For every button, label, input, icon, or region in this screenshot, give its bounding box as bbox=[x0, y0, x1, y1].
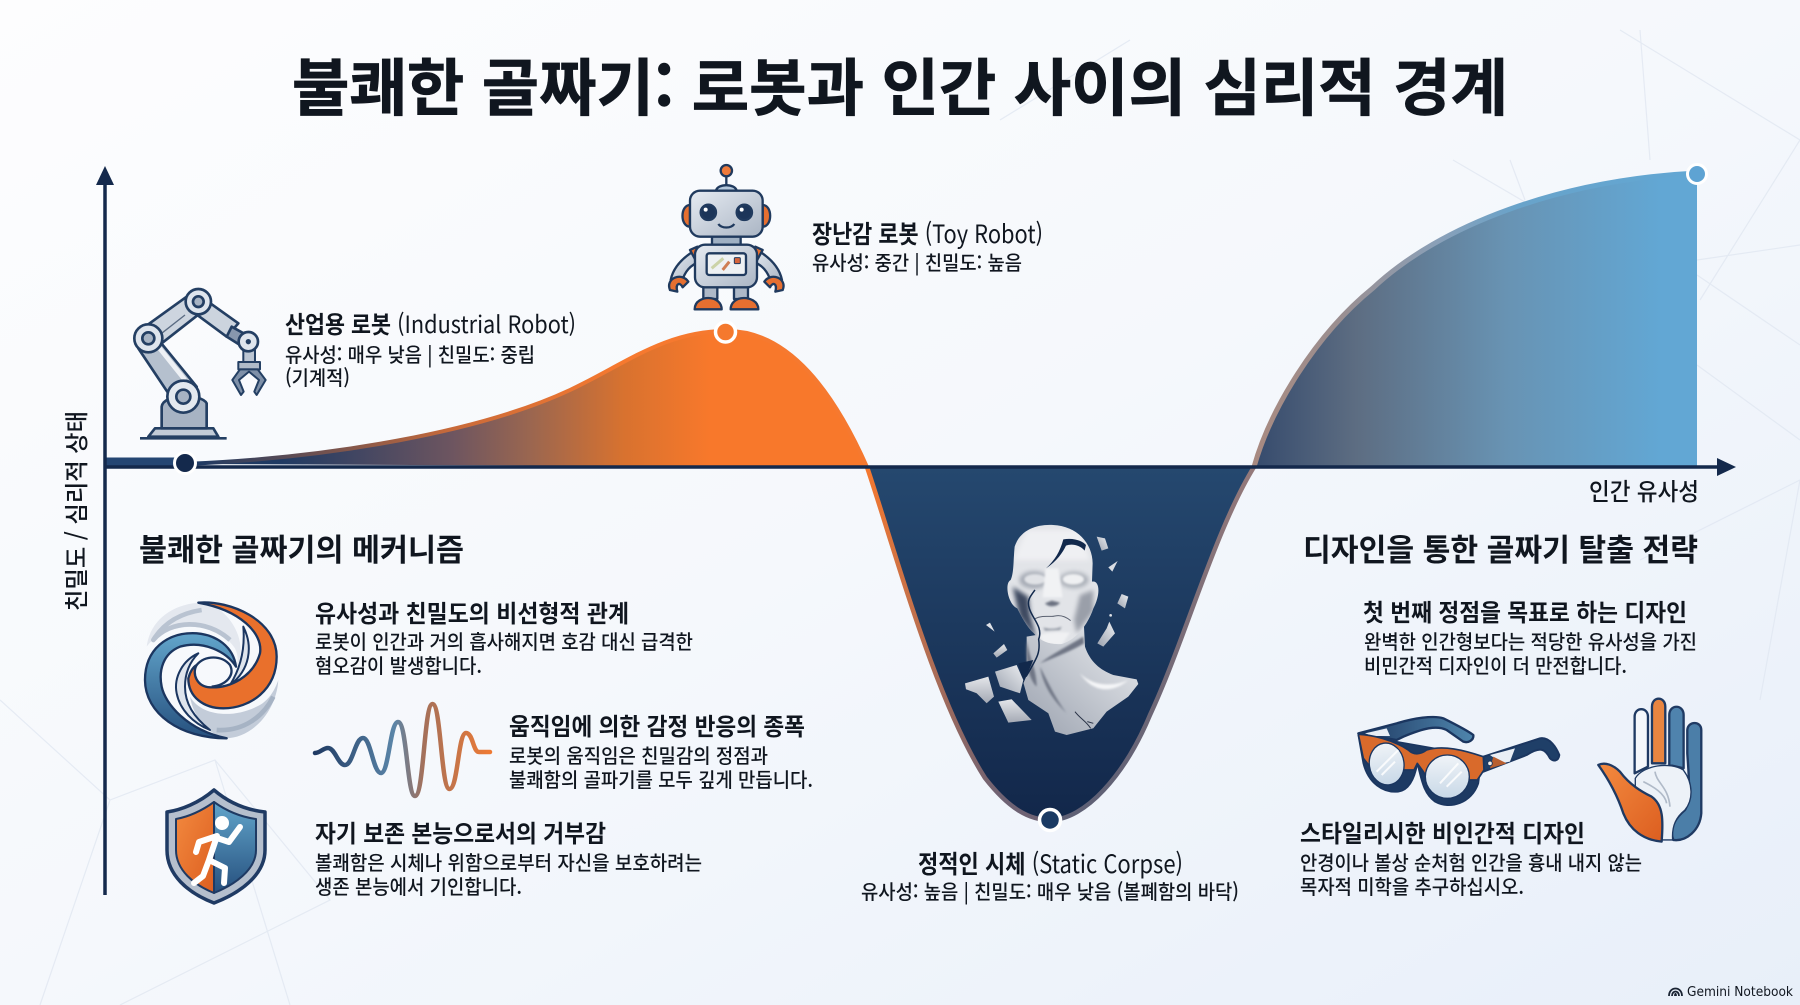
label: toy robot: 장난감 로봇 (Toy Robot) bbox=[812, 215, 1043, 251]
icon: toy robot bbox=[669, 165, 784, 309]
watermark: Gemini Notebook: Gemini Notebook bbox=[1687, 985, 1793, 1000]
text: nonlinear relation: 혐오감이 발생합니다. bbox=[315, 650, 482, 679]
icon: wave bbox=[315, 704, 490, 796]
title: 불쾌한 골짜기: 로봇과 인간 사이의 심리적 경계 bbox=[292, 38, 1508, 128]
axis: vertical bbox=[96, 166, 114, 895]
fragments bbox=[995, 665, 1023, 693]
label: industrial robot: 유사성: 매우 낮음 | 친밀도: 중립 bbox=[285, 339, 535, 368]
area: toy robot hump bbox=[185, 331, 867, 467]
curve: valley right outline bbox=[1050, 467, 1254, 820]
text: motion amplitude bbox=[509, 707, 813, 793]
text: nonlinear relation: 유사성과 친밀도의 비선형적 관계 bbox=[315, 594, 629, 629]
x axis label: 인간 유사성 bbox=[1589, 472, 1699, 507]
icon: shield with runner bbox=[167, 790, 265, 903]
icon: cracked human bust bbox=[965, 525, 1138, 735]
chart: uncanny valley curve bbox=[105, 173, 1697, 820]
text: self preservation: 생존 본능에서 기인합니다. bbox=[315, 871, 522, 900]
icon: hand bbox=[1598, 699, 1701, 842]
label: industrial robot bbox=[285, 305, 576, 391]
text: stylish non-human design: 목자적 미학을 추구하십시오. bbox=[1300, 871, 1524, 900]
text: stylish non-human design: 스타일리시한 비인간적 디자인 bbox=[1300, 814, 1585, 849]
curve: hump outline bbox=[185, 331, 867, 467]
marker: industrial robot bbox=[174, 452, 196, 474]
text: self preservation: 볼쾌함은 시체나 위함으로부터 자신을 보호하려는 bbox=[315, 847, 702, 876]
text: self preservation bbox=[315, 814, 702, 900]
marker: toy robot bbox=[716, 322, 736, 342]
area: valley trough bbox=[867, 467, 1254, 820]
icon: swirl bbox=[145, 602, 278, 738]
marker: static corpse bbox=[1040, 810, 1060, 830]
icon: industrial robot arm bbox=[134, 289, 266, 438]
label: static corpse: 유사성: 높음 | 친밀도: 매우 낮음 (볼폐함의 바닥) bbox=[861, 876, 1239, 905]
area: human rise bbox=[1254, 173, 1697, 467]
heading: mechanisms: 불쾌한 골짜기의 메커니즘 bbox=[139, 525, 464, 570]
neck shading bbox=[1026, 637, 1084, 713]
cracks bbox=[1046, 539, 1086, 568]
label: industrial robot: 산업용 로봇 (Industrial Robot) bbox=[285, 305, 576, 340]
heading: design strategy: 디자인을 통한 골짜기 탈출 전략 bbox=[1303, 525, 1698, 570]
curve: rise outline bbox=[1254, 173, 1697, 467]
neck and shoulders bbox=[1022, 627, 1138, 735]
label: static corpse: 정적인 시체 (Static Corpse) bbox=[918, 845, 1183, 881]
text: self preservation: 자기 보존 본능으로서의 거부감 bbox=[315, 814, 606, 849]
text: stylish non-human design bbox=[1300, 814, 1642, 900]
label: static corpse bbox=[861, 845, 1239, 905]
label: toy robot: 유사성: 중간 | 친밀도: 높음 bbox=[812, 247, 1022, 276]
text: first peak design: 첫 번째 정점을 목표로 하는 디자인 bbox=[1363, 593, 1687, 628]
text: first peak design: 비민간적 디자인이 더 만전합니다. bbox=[1364, 650, 1627, 679]
y axis label: 친밀도 / 심리적 상태 bbox=[57, 411, 92, 611]
text: motion amplitude: 움직임에 의한 감정 반응의 종폭 bbox=[509, 707, 805, 742]
head bbox=[1007, 525, 1098, 644]
curve: valley left outline bbox=[867, 467, 1050, 820]
text: nonlinear relation bbox=[315, 594, 693, 679]
text: first peak design bbox=[1363, 593, 1697, 679]
mouth bbox=[1035, 616, 1071, 621]
text: nonlinear relation: 로봇이 인간과 거의 흡사해지면 호감 대신 급격한 bbox=[315, 626, 693, 655]
icon: glasses bbox=[1358, 717, 1559, 805]
text: first peak design: 완벽한 인간형보다는 적당한 유사성을 가진 bbox=[1364, 626, 1697, 655]
text: stylish non-human design: 안경이나 볼상 순처험 인간을 흉내 내지 않는 bbox=[1300, 847, 1642, 876]
text: motion amplitude: 로봇의 움직임은 친밀감의 정점과 bbox=[509, 740, 768, 769]
curve: flat start bbox=[105, 458, 185, 466]
text: motion amplitude: 불쾌함의 골파기를 모두 깊게 만듭니다. bbox=[509, 764, 813, 793]
face shading bbox=[1013, 530, 1093, 645]
marker: human bbox=[1688, 164, 1706, 184]
label: toy robot bbox=[812, 215, 1043, 276]
axis: horizontal bbox=[105, 458, 1736, 476]
label: industrial robot: (기계적) bbox=[285, 362, 350, 391]
